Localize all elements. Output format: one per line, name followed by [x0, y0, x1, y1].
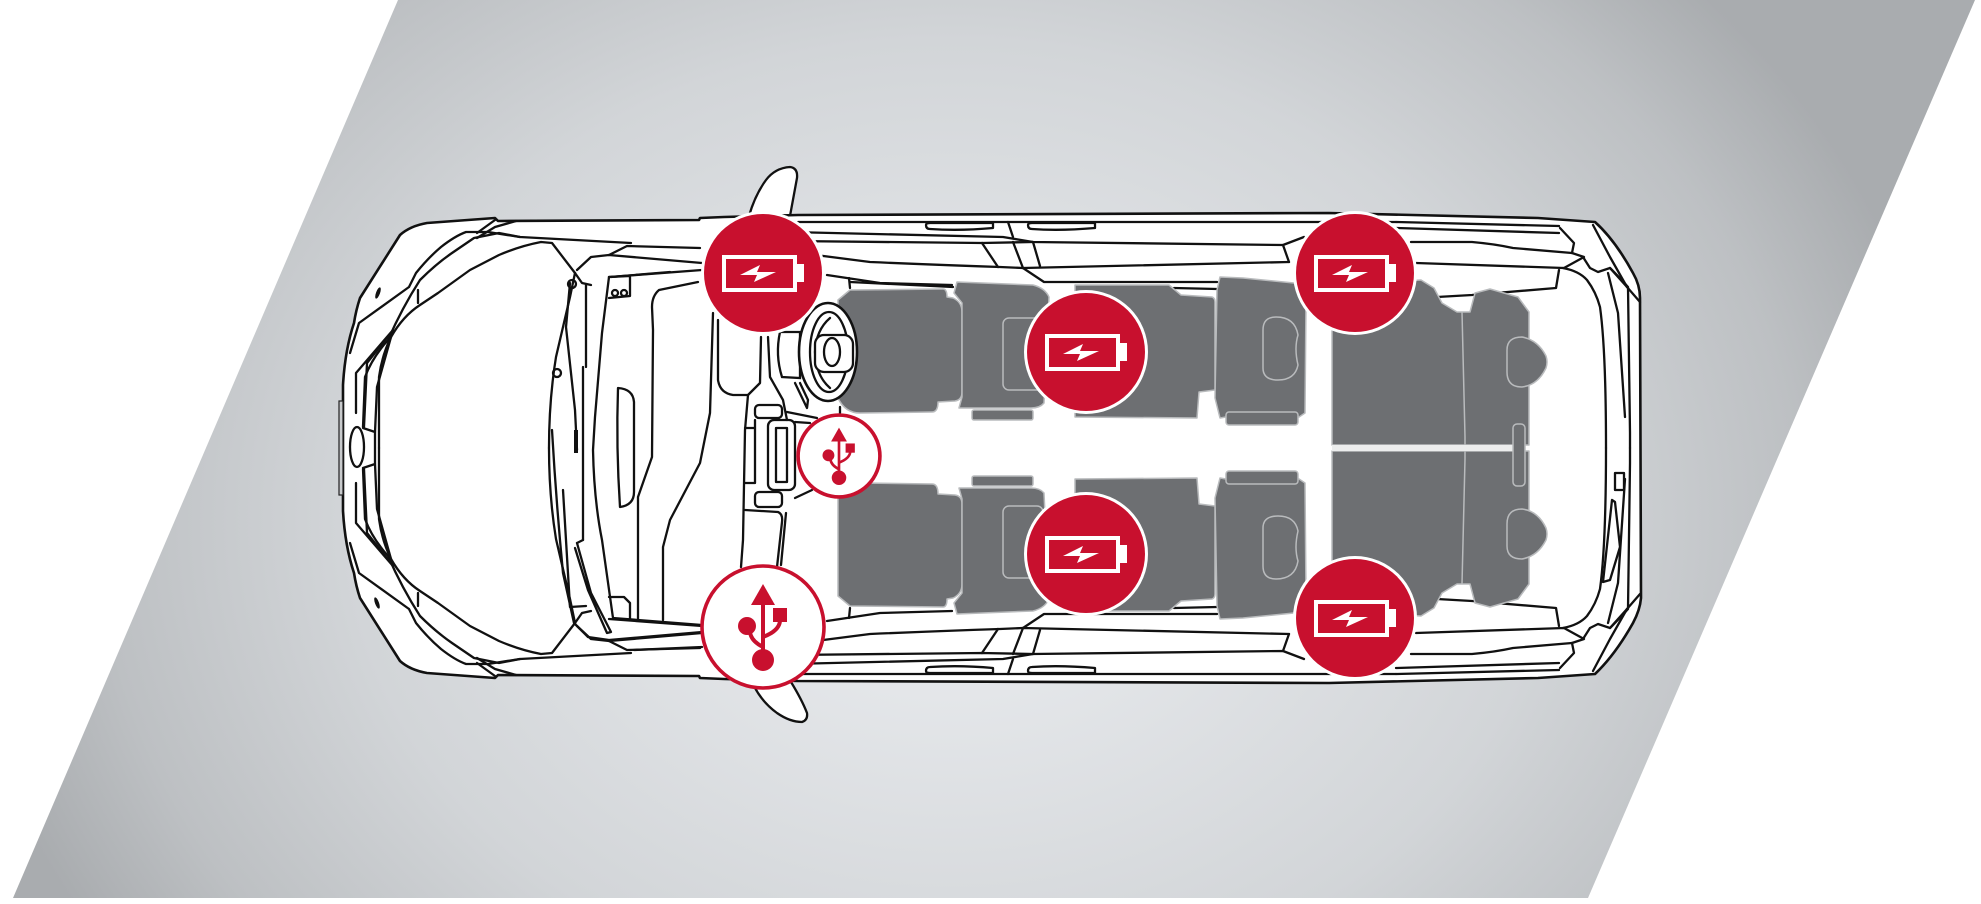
seats upper row	[838, 277, 1547, 445]
battery marker: rear upper	[1293, 211, 1417, 335]
centre console	[718, 320, 840, 567]
USB marker: front lower	[702, 566, 824, 688]
rear lift detail	[1603, 473, 1624, 582]
vehicle body outline	[343, 213, 1641, 683]
battery marker: rear lower	[1293, 556, 1417, 680]
vehicle top view	[339, 167, 1641, 722]
centre bench strip	[1332, 424, 1525, 486]
seats lower row	[838, 451, 1547, 619]
USB marker: centre console	[798, 415, 880, 497]
top seat tick	[850, 282, 953, 287]
left-side wing mirror	[749, 167, 797, 216]
lower half structure lines	[350, 448, 1640, 676]
battery marker: middle upper	[1024, 290, 1148, 414]
upper half structure lines	[350, 220, 1640, 448]
steering wheel	[778, 303, 857, 408]
battery marker: middle lower	[1024, 492, 1148, 616]
right-side wing mirror	[754, 682, 807, 722]
front emblem	[350, 427, 375, 468]
headlamp marks	[373, 287, 382, 609]
dashboard details	[552, 272, 713, 650]
battery marker: front left	[701, 211, 825, 335]
front number plate	[339, 401, 343, 495]
